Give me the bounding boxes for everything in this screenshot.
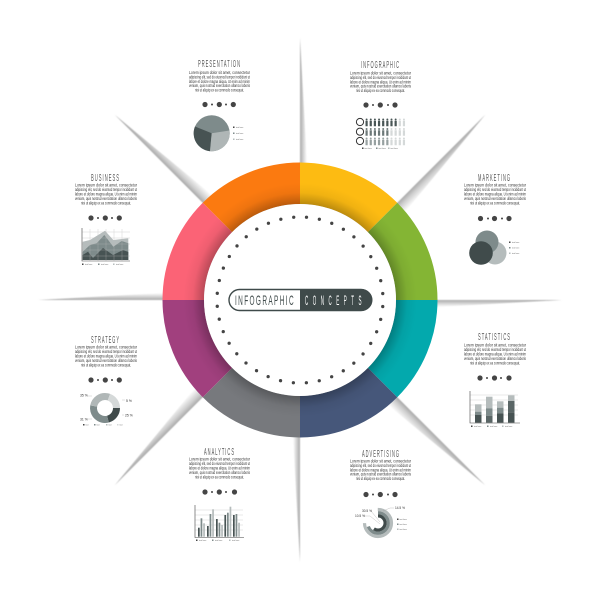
segment: yellow: [300, 162, 397, 232]
dots: [202, 489, 237, 495]
donut labels: 35 %: [80, 394, 88, 398]
dots: [363, 492, 398, 497]
dotted circle: [211, 211, 389, 389]
text block: adipiscing elit, sed do eiusmod tempor incididunt ut: [189, 74, 251, 80]
legend: text here: [232, 539, 239, 542]
area chart: [82, 228, 130, 261]
legend: text here: [101, 263, 108, 266]
text block: veniam, quis nostrud exercitation ullamco laboris: [189, 470, 250, 475]
radial labels: 10.5 %: [355, 514, 365, 518]
legend: text here: [85, 263, 92, 266]
text block: nisi ut aliquip ex ea commodo consequat.: [81, 200, 131, 206]
donut labels: [80, 394, 133, 422]
text block: veniam, quis nostrud exercitation ullamco laboris: [75, 196, 137, 201]
ring inner shading: [162, 162, 438, 438]
text: PRESENTATION: [198, 59, 241, 70]
panel: analytics: [189, 447, 251, 542]
legend: [362, 147, 398, 150]
radial bar chart: [364, 510, 392, 536]
text block: labore et dolore magna aliqua. Ut enim ad minim: [75, 354, 137, 358]
segment: teal: [368, 300, 438, 397]
text block: Lorem ipsum dolor sit amet, consectetur: [75, 344, 138, 350]
radial fold shadows: [38, 38, 562, 562]
donut chart: [90, 393, 120, 423]
text block: labore et dolore magna aliqua. Ut enim ad minim: [75, 192, 137, 196]
legend: text here: [400, 528, 407, 531]
donut labels: 25 %: [125, 414, 133, 418]
text block: Lorem ipsum dolor sit amet, consectetur: [350, 71, 412, 76]
text block: veniam, quis nostrud exercitation ullamco laboris: [189, 83, 250, 88]
text block: [350, 71, 412, 93]
segment: grey: [203, 368, 300, 438]
text block: adipiscing elit, sed do eiusmod tempor incididunt ut: [75, 349, 138, 354]
text block: Lorem ipsum dolor sit amet, consectetur: [189, 70, 251, 75]
text block: nisi ut aliquip ex ea commodo consequat.: [356, 88, 405, 93]
legend: text here: [512, 252, 519, 255]
panel: infographic: [350, 60, 412, 150]
segment: navy: [300, 368, 397, 438]
legend: [83, 424, 123, 426]
text block: nisi ut aliquip ex ea commodo consequat.: [356, 476, 405, 481]
pie chart: [194, 115, 230, 151]
panel: infographic: INFOGRAPHIC: [361, 60, 400, 71]
text block: [189, 70, 251, 92]
radial labels: 14.5 %: [395, 506, 405, 510]
legend: text here: [512, 246, 519, 250]
text block: veniam, quis nostrud exercitation ullamco laboris: [75, 358, 137, 363]
legend: text here: [199, 539, 206, 542]
text block: nisi ut aliquip ex ea commodo consequat.: [470, 200, 520, 206]
legend: text here: [505, 425, 512, 428]
panel: marketing: MARKETING: [478, 173, 511, 184]
panel: business: [75, 173, 138, 266]
legend: text here: [378, 147, 386, 150]
venn diagram: [469, 230, 506, 265]
text block: adipiscing elit, sed do eiusmod tempor incididunt ut: [189, 461, 251, 466]
radial labels: 30.5 %: [362, 509, 372, 513]
text block: veniam, quis nostrud exercitation ullamco laboris: [464, 196, 526, 201]
panel: analytics: ANALYTICS: [204, 447, 235, 458]
legend: [233, 126, 243, 141]
legend: text here: [400, 523, 407, 526]
text block: Lorem ipsum dolor sit amet, consectetur: [189, 456, 251, 462]
panel: strategy: STRATEGY: [91, 335, 120, 346]
segment: purple: [162, 300, 232, 397]
text block: adipiscing elit, sed do eiusmod tempor incididunt ut: [75, 187, 138, 192]
grouped bar chart: [195, 505, 244, 538]
legend: text here: [512, 241, 519, 244]
text block: [464, 182, 527, 206]
legend: text here: [474, 425, 481, 428]
legend: [509, 241, 519, 255]
text block: labore et dolore magna aliqua. Ut enim ad minim: [350, 467, 411, 472]
text block: labore et dolore magna aliqua. Ut enim ad minim: [464, 192, 526, 196]
panel: advertising: ADVERTISING: [362, 449, 400, 460]
panel: advertising: [350, 449, 412, 536]
pictogram chart: [356, 118, 407, 145]
radial labels: [355, 506, 405, 524]
legend: text here: [236, 126, 243, 129]
legend: [82, 263, 123, 266]
text block: veniam, quis nostrud exercitation ullamco laboris: [350, 472, 411, 477]
text block: adipiscing elit, sed do eiusmod tempor incididunt ut: [350, 463, 412, 468]
panel: statistics: STATISTICS: [478, 332, 511, 343]
legend: text: [120, 424, 123, 426]
stacked bar chart: [470, 391, 520, 423]
text block: [75, 182, 138, 206]
donut labels: 31 %: [80, 418, 88, 422]
dots: [363, 102, 398, 108]
panel: presentation: [189, 59, 251, 151]
legend: [397, 518, 407, 531]
legend: [471, 425, 512, 428]
text block: [75, 344, 138, 368]
text block: nisi ut aliquip ex ea commodo consequat.: [81, 362, 131, 368]
colour ring: [162, 162, 438, 438]
text block: veniam, quis nostrud exercitation ullamco laboris: [350, 84, 411, 89]
text block: Lorem ipsum dolor sit amet, consectetur: [350, 459, 412, 464]
text block: [350, 459, 412, 481]
legend: text: [108, 424, 112, 426]
donut labels: 5 %: [126, 399, 132, 403]
text block: nisi ut aliquip ex ea commodo consequat.: [470, 360, 520, 366]
text block: [189, 456, 251, 480]
dots: [477, 375, 512, 381]
panel: statistics: [464, 332, 527, 428]
text block: veniam, quis nostrud exercitation ullamco laboris: [464, 356, 526, 361]
text block: adipiscing elit, sed do eiusmod tempor incididunt ut: [464, 347, 527, 352]
segment: pink: [162, 203, 232, 300]
text block: Lorem ipsum dolor sit amet, consectetur: [464, 342, 527, 348]
text block: [464, 342, 527, 366]
panel: business: BUSINESS: [91, 173, 120, 184]
segment: green: [368, 203, 438, 300]
text block: Lorem ipsum dolor sit amet, consectetur: [464, 182, 527, 188]
legend: text here: [215, 539, 222, 542]
text block: adipiscing elit, sed do eiusmod tempor incididunt ut: [350, 75, 412, 80]
text block: labore et dolore magna aliqua. Ut enim ad minim: [189, 466, 250, 470]
centre pill title: INFOGRAPHIC: [235, 292, 295, 308]
centre pill title: [229, 289, 372, 311]
legend: text here: [364, 147, 372, 150]
text block: labore et dolore magna aliqua. Ut enim ad minim: [464, 352, 526, 356]
segment: orange: [203, 162, 300, 232]
text block: nisi ut aliquip ex ea commodo consequat.: [195, 87, 244, 92]
text block: nisi ut aliquip ex ea commodo consequat.: [195, 474, 244, 480]
legend: text: [96, 424, 100, 426]
text block: labore et dolore magna aliqua. Ut enim ad minim: [189, 79, 250, 84]
legend: text here: [236, 138, 243, 141]
legend: text here: [390, 147, 398, 150]
dots: [88, 377, 122, 383]
legend: text here: [490, 425, 497, 428]
dots: [202, 102, 236, 107]
dots: [478, 216, 512, 221]
text: CONCEPTS: [305, 292, 366, 308]
centre disc: [204, 204, 396, 396]
legend: text here: [236, 132, 243, 135]
panel: strategy: [75, 335, 138, 426]
legend: text: [86, 424, 89, 426]
dots: [88, 215, 122, 221]
text block: adipiscing elit, sed do eiusmod tempor incididunt ut: [464, 187, 527, 192]
legend: text here: [400, 518, 407, 521]
text block: labore et dolore magna aliqua. Ut enim ad minim: [350, 79, 411, 84]
legend: [196, 539, 239, 542]
text block: Lorem ipsum dolor sit amet, consectetur: [75, 182, 138, 188]
panel: marketing: [464, 173, 527, 265]
legend: text here: [116, 263, 123, 266]
